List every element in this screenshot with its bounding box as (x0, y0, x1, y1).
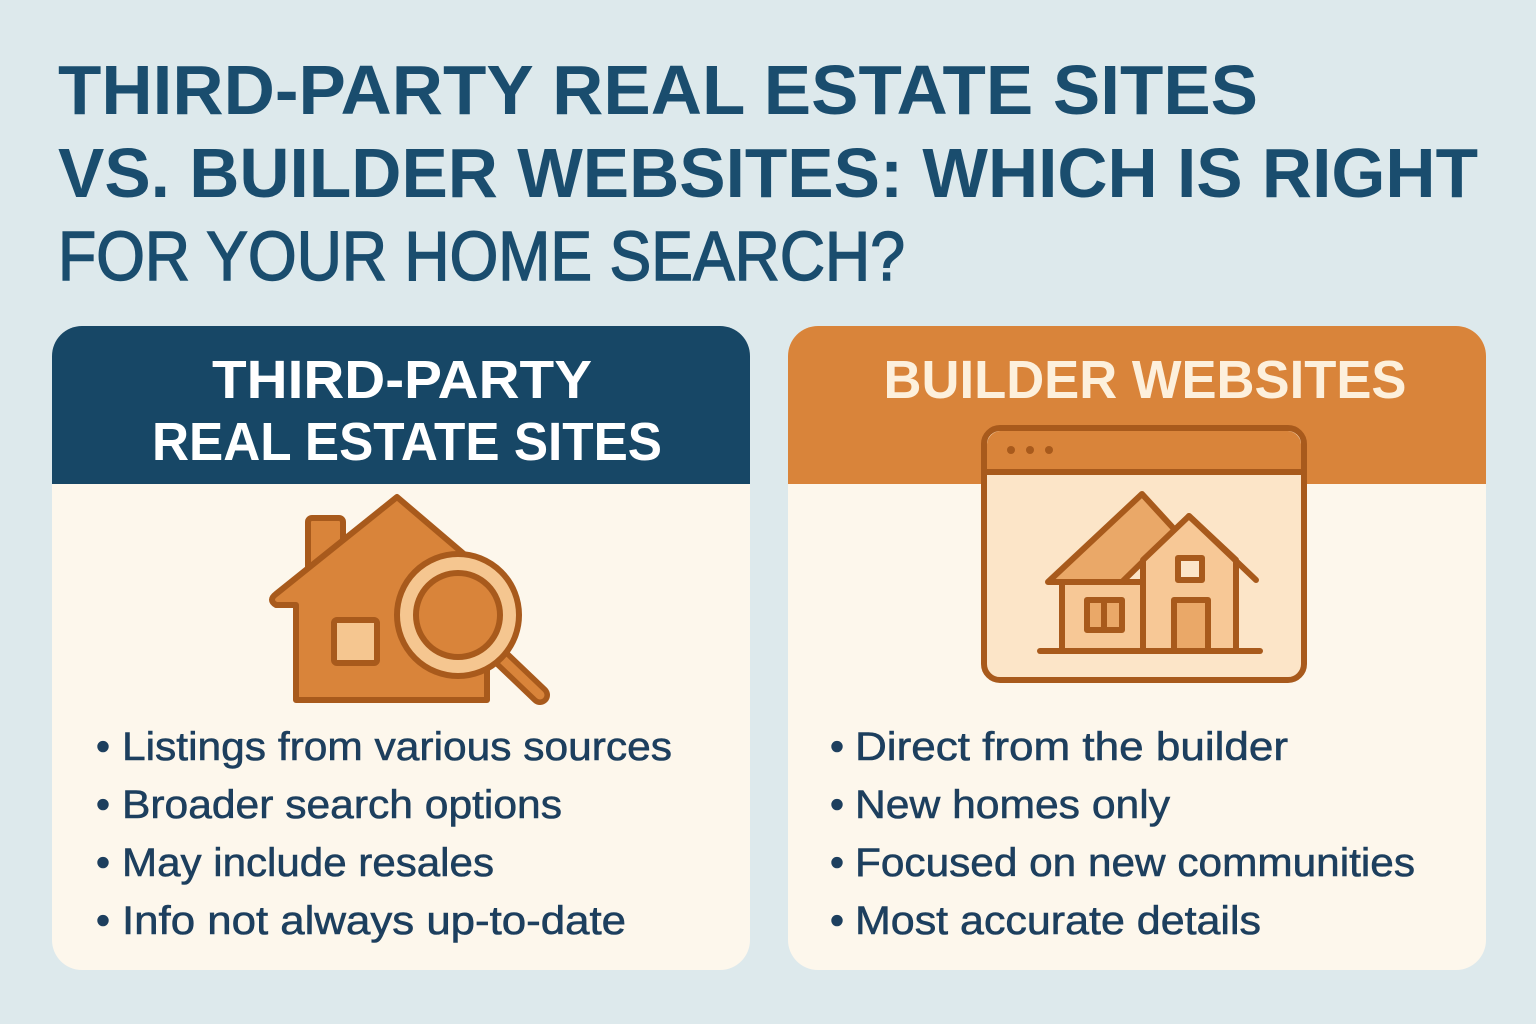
bullets: builder: Direct from the builder (855, 725, 1288, 769)
bullets: builder: Focused on new communities (855, 841, 1415, 885)
bullets: third-party: • (96, 841, 110, 885)
panel header: third-party: REAL ESTATE SITES (152, 412, 662, 472)
bullets: third-party: Listings from various sources (122, 725, 672, 769)
bullets: builder (830, 725, 1415, 943)
panel header: builder: BUILDER WEBSITES (884, 350, 1406, 410)
bullets: builder: • (830, 899, 844, 943)
bullets: builder: New homes only (855, 783, 1170, 827)
panel: third-party sites (52, 326, 750, 970)
bullets: builder: Most accurate details (855, 899, 1261, 943)
icon: browser with houses (984, 428, 1304, 680)
bullets: third-party: Info not always up-to-date (122, 899, 626, 943)
bullets: third-party: • (96, 899, 110, 943)
bullets: third-party: May include resales (122, 841, 494, 885)
panel: builder websites (788, 326, 1486, 970)
title: VS. BUILDER WEBSITES: WHICH IS RIGHT (58, 134, 1478, 212)
bullets: builder: • (830, 783, 844, 827)
bullets: third-party: Broader search options (122, 783, 562, 827)
bullets: builder: • (830, 841, 844, 885)
panel header: third-party: THIRD-PARTY (212, 350, 592, 410)
bullets: third-party: • (96, 725, 110, 769)
bullets: builder: • (830, 725, 844, 769)
panel header: builder (788, 326, 1486, 484)
panel header: third-party (52, 326, 750, 484)
bullets: third-party (96, 725, 672, 943)
title: THIRD-PARTY REAL ESTATE SITES (58, 51, 1258, 129)
title (58, 51, 1478, 295)
bullets: third-party: • (96, 783, 110, 827)
title: FOR YOUR HOME SEARCH? (58, 217, 905, 295)
icon: house with magnifier (272, 497, 540, 700)
